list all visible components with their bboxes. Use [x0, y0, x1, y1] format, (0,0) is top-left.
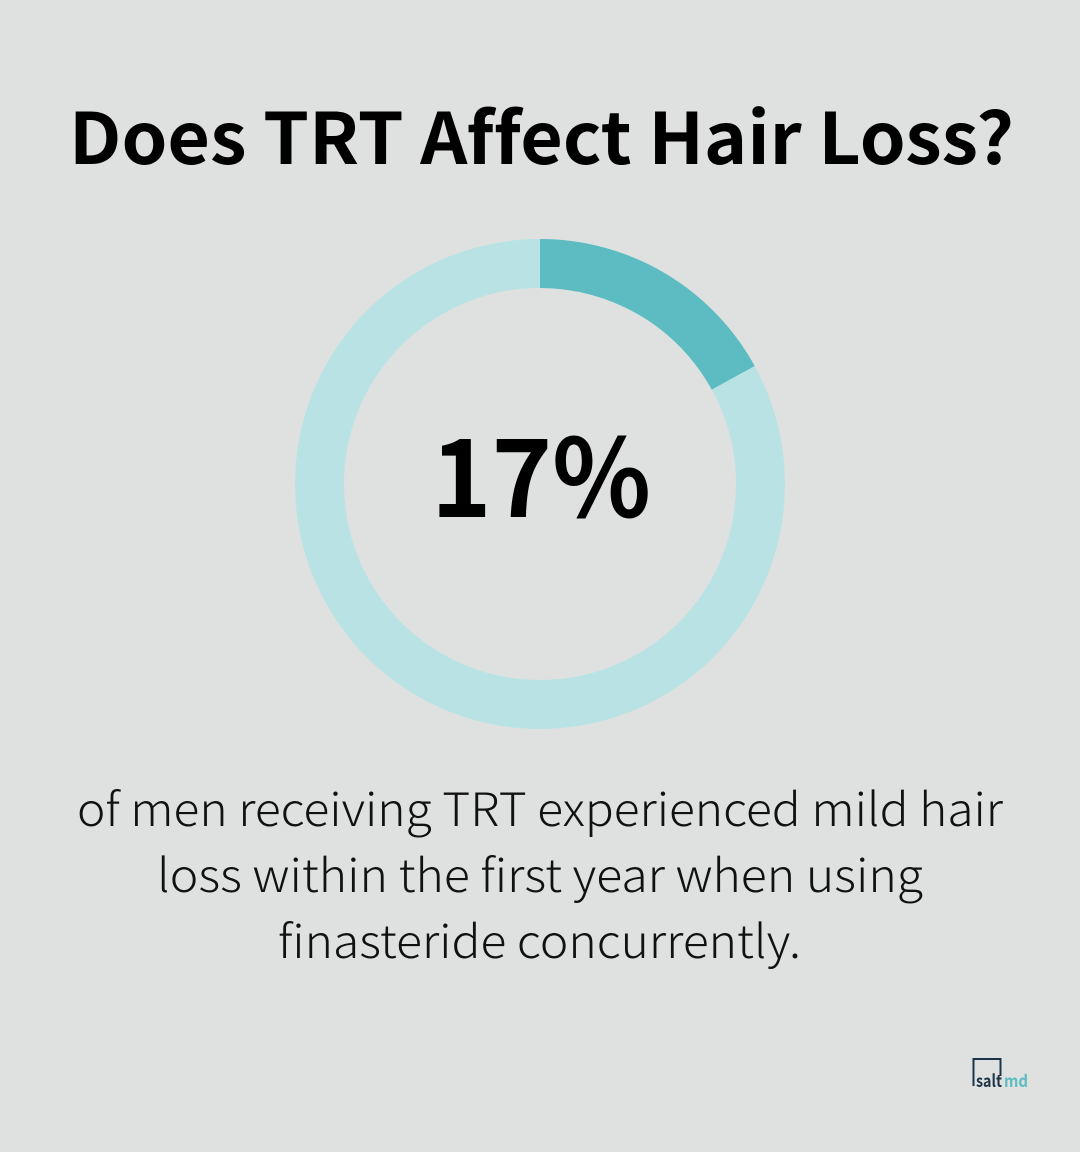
description text: loss within the first year when using: [157, 840, 923, 906]
logo: saltmd: salt: [976, 1067, 1002, 1092]
description text: of men receiving TRT experienced mild hair: [77, 774, 1004, 840]
title: Does TRT Affect Hair Loss?: [69, 83, 1014, 185]
logo: saltmd: [974, 1059, 1028, 1092]
description text: [77, 774, 1004, 972]
donut chart: [320, 264, 760, 704]
description text: finasteride concurrently.: [278, 906, 801, 972]
percentage value: 17%: [431, 393, 651, 549]
logo: saltmd: md: [1004, 1067, 1028, 1092]
